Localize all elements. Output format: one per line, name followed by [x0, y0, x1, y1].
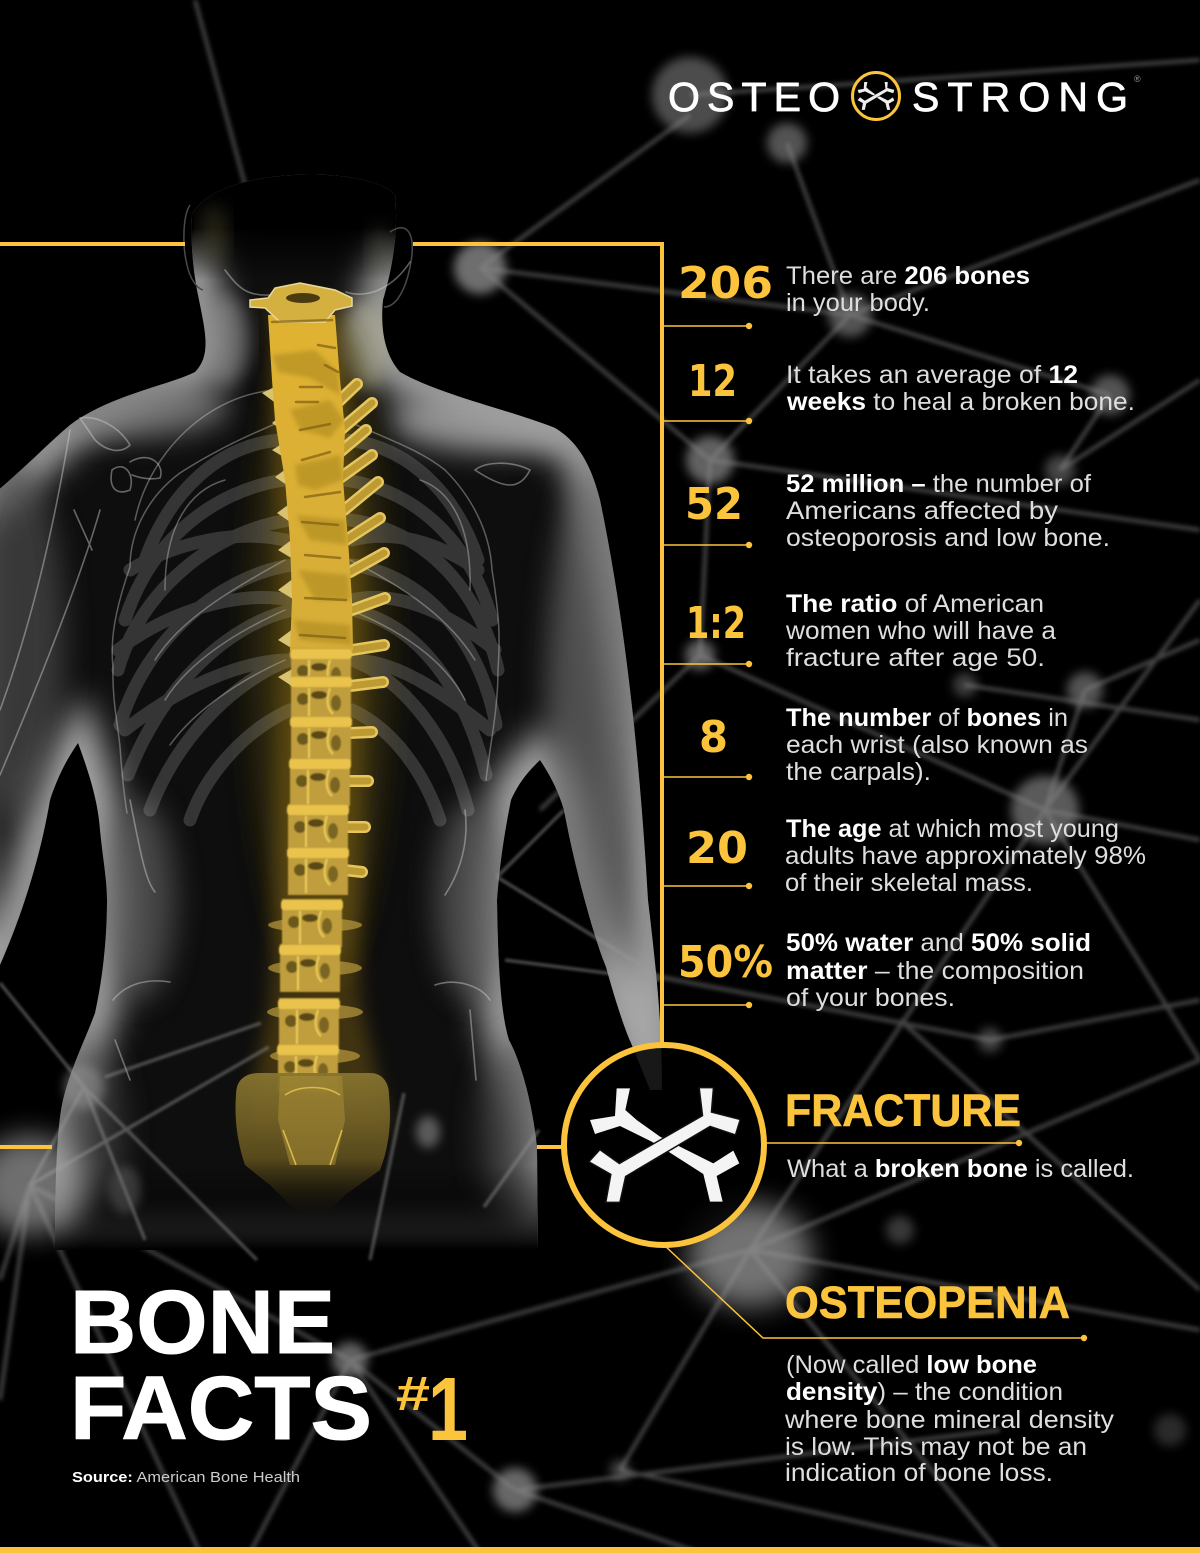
fact: 12 weeks: 12 — [688, 356, 737, 407]
fact: 8 carpals: 8 — [699, 712, 728, 763]
logo: ® — [1134, 74, 1141, 84]
upper spinal column — [268, 315, 353, 650]
logo — [668, 72, 1141, 120]
fact: 1:2 ratio: women who will have a — [785, 617, 1056, 645]
definition: osteopenia: OSTEOPENIA — [785, 1277, 1070, 1328]
fact: 50% water: matter – the composition — [786, 957, 1084, 985]
spine — [235, 283, 390, 1215]
logo: OSTEO — [668, 74, 840, 120]
fact: 50% water: of your bones. — [786, 984, 955, 1012]
right transverse processes — [335, 384, 385, 872]
fact: 8 carpals: the carpals). — [786, 758, 931, 786]
body silhouette with soft rim light — [0, 174, 662, 1250]
sacrum — [235, 1073, 390, 1215]
fact: age 20: The age at which most young — [786, 815, 1119, 843]
title — [70, 1273, 468, 1460]
ears — [184, 205, 412, 307]
fact: 8 carpals — [663, 704, 1088, 786]
fact: 1:2 ratio: fracture after age 50. — [786, 644, 1045, 672]
fact: 52 million: osteoporosis and low bone. — [786, 524, 1110, 552]
definition: fracture: FRACTURE — [785, 1085, 1021, 1136]
title: # — [396, 1368, 430, 1421]
lower vertebrae — [277, 648, 352, 1092]
fact: 1:2 ratio — [663, 590, 1056, 672]
definition: osteopenia: density) – the condition — [786, 1378, 1063, 1406]
fact: 206 bones: 206 — [678, 258, 773, 309]
skeleton: ribs, shoulder blades and arm bones — [0, 262, 530, 1080]
title: 1 — [428, 1360, 468, 1460]
fact: 12 weeks: weeks to heal a broken bone. — [786, 388, 1135, 416]
definition: fracture: What a broken bone is called. — [787, 1155, 1134, 1183]
fact: 8 carpals: The number of bones in — [786, 704, 1068, 732]
fact: 206 bones: in your body. — [786, 289, 930, 317]
fact: 1:2 ratio: 1:2 — [686, 598, 746, 649]
definition: fracture — [765, 1085, 1134, 1183]
fact: 52 million: Americans affected by — [786, 497, 1059, 525]
upper column shading — [272, 350, 352, 645]
frame lines — [0, 244, 662, 1147]
atlas vertebra — [250, 283, 352, 322]
neuron lines over the hips — [0, 810, 660, 1260]
fact: 52 million — [663, 470, 1110, 552]
definition: osteopenia: (Now called low bone — [786, 1351, 1037, 1379]
fact: age 20 — [663, 815, 1146, 897]
fact: 12 weeks — [663, 356, 1135, 424]
source: Source: American Bone Health — [72, 1469, 300, 1486]
left bumps — [262, 382, 298, 690]
upper vertebra marks — [272, 320, 346, 638]
facts list — [663, 258, 1146, 1012]
title: BONE — [70, 1273, 335, 1373]
fact: 50% water: 50% — [678, 937, 773, 988]
fact: 206 bones: There are 206 bones — [786, 262, 1030, 290]
bone circle emblem — [564, 1045, 764, 1245]
fact: 8 carpals: each wrist (also known as — [786, 731, 1088, 759]
fact: 12 weeks: It takes an average of 12 — [786, 361, 1078, 389]
definition: osteopenia — [664, 1245, 1115, 1487]
fact: age 20: 20 — [686, 823, 748, 874]
spine glow — [245, 300, 390, 1130]
logo emblem — [852, 72, 900, 120]
fact: 52 million: 52 — [685, 479, 743, 530]
title: FACTS — [70, 1359, 372, 1459]
fact: 52 million: 52 million – the number of — [786, 470, 1091, 498]
fact: 50% water: 50% water and 50% solid — [786, 929, 1091, 957]
fact: 50% water — [663, 929, 1091, 1012]
fact: 206 bones — [663, 258, 1030, 329]
fact: 1:2 ratio: The ratio of American — [786, 590, 1044, 618]
fact: age 20: adults have approximately 98% — [785, 842, 1146, 870]
definition: osteopenia: indication of bone loss. — [785, 1459, 1053, 1487]
fact: age 20: of their skeletal mass. — [785, 869, 1033, 897]
neuron nodes over the hips — [0, 1065, 440, 1235]
definition: osteopenia: is low. This may not be an — [785, 1433, 1087, 1461]
bottom bar — [0, 1547, 1200, 1553]
icon: crossed bones — [590, 1088, 739, 1202]
definition: osteopenia: where bone mineral density — [784, 1406, 1115, 1434]
logo: STRONG — [912, 74, 1128, 120]
lumbar wings — [267, 918, 363, 1064]
